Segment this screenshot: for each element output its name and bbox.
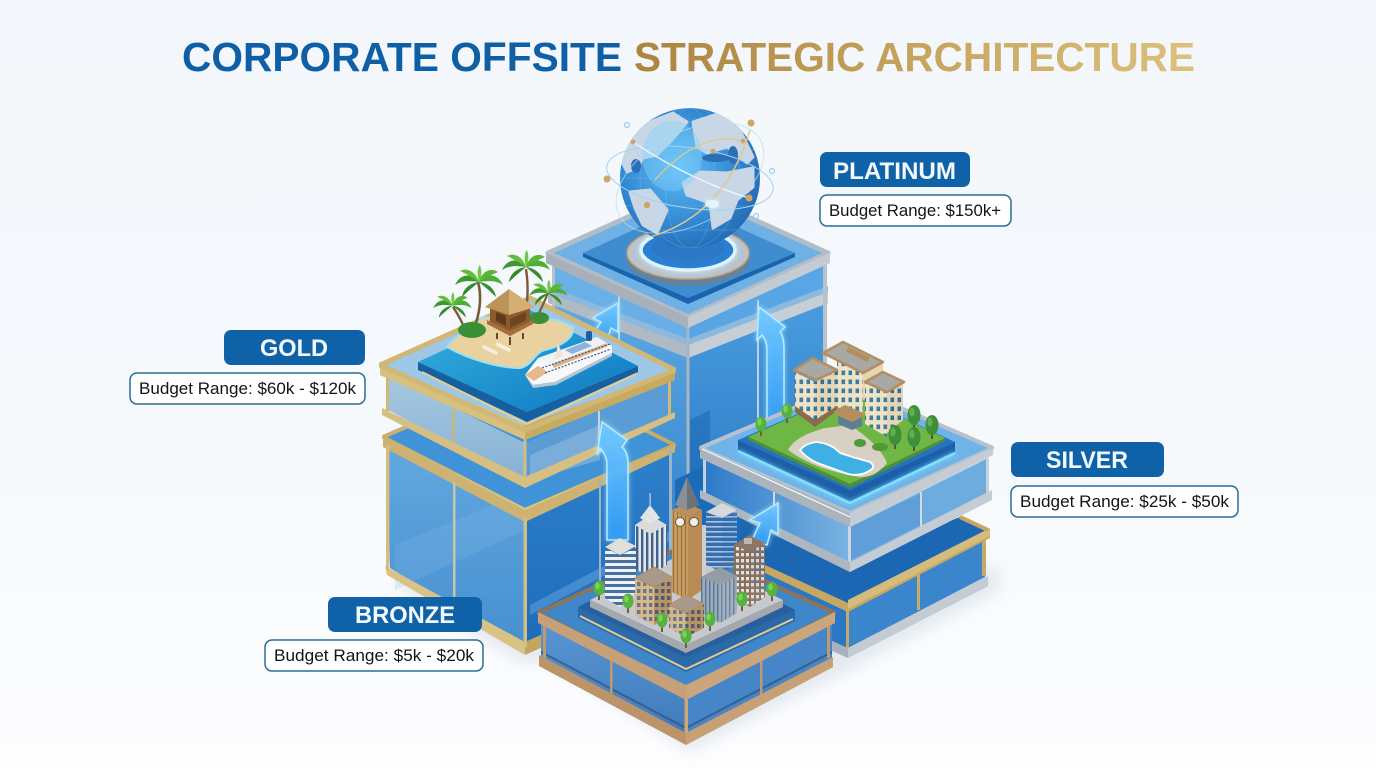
globe <box>604 108 775 286</box>
label: bronze: Budget Range: $5k - $20k <box>274 647 475 665</box>
street trees <box>594 580 604 600</box>
label: silver: SILVER <box>1046 447 1128 474</box>
arrow: bronze to gold <box>597 422 628 540</box>
blue skyscraper <box>706 503 737 572</box>
beach hut <box>485 289 535 345</box>
arrow: bronze to silver <box>750 503 778 545</box>
gold tier lower block <box>383 373 675 655</box>
label: platinum: PLATINUM <box>833 158 956 185</box>
display plate <box>583 205 795 298</box>
title: STRATEGIC ARCHITECTURE <box>634 34 1195 80</box>
cruise ship <box>525 331 612 388</box>
title <box>182 34 1195 80</box>
silver tier lower block <box>675 395 990 658</box>
gold tier upper tray <box>380 250 675 488</box>
silver tier upper tray <box>700 385 993 572</box>
tan block small <box>669 595 704 637</box>
label: gold <box>130 330 365 404</box>
bronze tier <box>538 545 835 745</box>
city platform <box>578 552 795 658</box>
ground shadows <box>395 500 1000 752</box>
clock tower <box>672 477 706 600</box>
swimming pool <box>800 442 873 475</box>
label: bronze <box>265 597 483 671</box>
upper glass bands <box>552 262 688 350</box>
label: silver <box>1011 442 1238 517</box>
grey block <box>701 567 737 623</box>
title: CORPORATE OFFSITE <box>182 34 622 80</box>
hotel left wing <box>794 358 837 427</box>
silver platform <box>738 392 955 490</box>
hotel <box>794 342 904 437</box>
label: gold: Budget Range: $60k - $120k <box>139 380 357 398</box>
label: platinum: Budget Range: $150k+ <box>829 202 1001 220</box>
globe sphere <box>620 108 760 248</box>
courtyard paving <box>788 425 887 477</box>
top frame <box>548 190 828 317</box>
hotel right wing <box>865 372 904 437</box>
brown tower <box>734 535 765 607</box>
orbit lines <box>598 100 782 256</box>
hotel entrance <box>833 405 866 422</box>
city skyline <box>594 477 778 648</box>
spire skyscraper <box>635 493 667 575</box>
posts <box>552 262 555 352</box>
label: silver: Budget Range: $25k - $50k <box>1020 493 1230 511</box>
arrow: silver to platinum <box>757 307 785 430</box>
platinum tower <box>546 190 830 640</box>
hotel central wing <box>823 342 883 416</box>
globe pedestal <box>626 227 750 286</box>
tower body <box>552 262 688 640</box>
white tower <box>605 538 636 607</box>
arrow: gold to platinum <box>590 303 618 345</box>
green lawn <box>748 392 945 484</box>
deck chairs <box>484 344 509 353</box>
label: gold: GOLD <box>260 335 328 362</box>
network nodes <box>604 120 754 208</box>
tan block left <box>635 567 672 625</box>
palm trunks and fronds <box>433 250 568 338</box>
island platform water <box>418 310 638 412</box>
island sand <box>447 317 573 368</box>
mid-frame <box>548 292 828 358</box>
label: platinum <box>820 152 1011 226</box>
hotel trees <box>756 404 938 451</box>
label: bronze: BRONZE <box>355 602 455 629</box>
